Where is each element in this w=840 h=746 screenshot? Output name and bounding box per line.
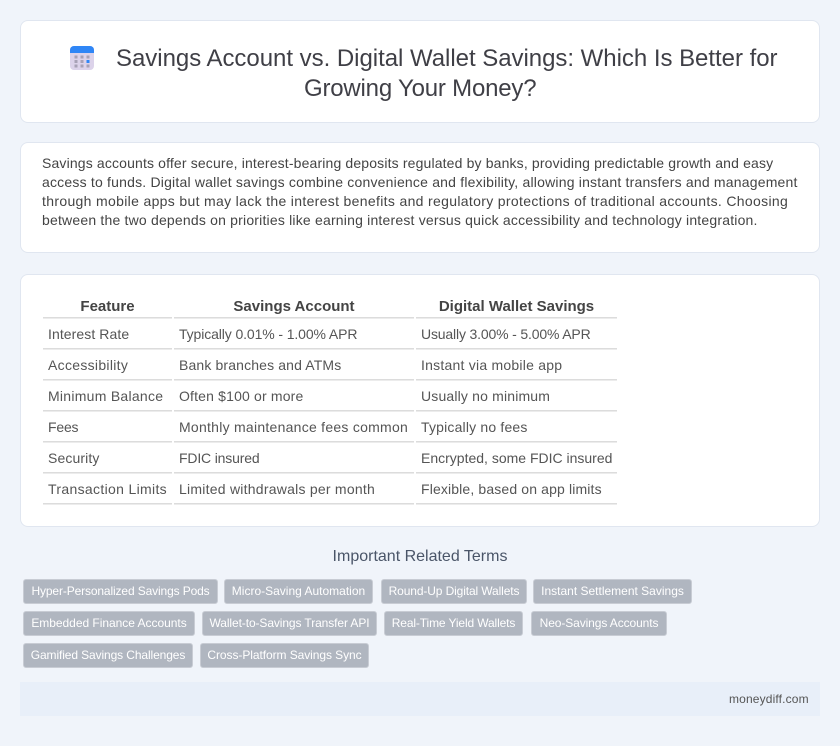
panel: introduction xyxy=(20,142,820,253)
row: Minimum Balance: Minimum Balance xyxy=(48,388,163,404)
tag xyxy=(384,611,523,636)
row: Fees: Fees xyxy=(48,419,78,435)
footer: moneydiff.com: moneydiff.com xyxy=(729,692,809,706)
tag xyxy=(23,579,218,604)
Digital Wallet transaction limits: Flexible, based on app limits xyxy=(421,481,602,497)
row: Accessibility: Accessibility xyxy=(48,357,128,373)
text block: introduction: through mobile apps but may lack the interest benefits and regulatory protections of traditional accounts. Choosing xyxy=(42,193,788,209)
panel: title header xyxy=(20,20,820,123)
table header: Savings Account: Savings Account xyxy=(233,298,355,315)
tag: Wallet-to-Savings Transfer API xyxy=(210,616,369,630)
tag xyxy=(533,579,692,604)
tag xyxy=(23,611,195,636)
Savings Account minimum balance: Often $100 or more xyxy=(179,388,303,404)
text block: introduction: Savings accounts offer secure, interest-bearing deposits regulated by banks, providing predictable growth and easy xyxy=(42,155,773,171)
icon: calendar xyxy=(70,46,94,70)
tag xyxy=(200,643,369,668)
tag: Cross-Platform Savings Sync xyxy=(207,648,362,662)
tag: Embedded Finance Accounts xyxy=(31,616,187,630)
tag: Real-Time Yield Wallets xyxy=(392,616,515,630)
text block: introduction xyxy=(42,155,798,228)
title: Savings Account vs. Digital Wallet Savings: Which Is Better for xyxy=(116,45,778,72)
footer bar xyxy=(20,682,820,716)
title xyxy=(116,45,778,102)
Digital Wallet interest rate: Usually 3.00% - 5.00% APR xyxy=(421,326,591,342)
row: Interest Rate: Interest Rate xyxy=(48,326,129,342)
tag: Micro-Saving Automation xyxy=(232,584,365,598)
title: Growing Your Money? xyxy=(304,75,536,102)
tag: Gamified Savings Challenges xyxy=(31,648,185,662)
tag: Round-Up Digital Wallets xyxy=(389,584,519,598)
Digital Wallet fees: Typically no fees xyxy=(421,419,528,435)
tag xyxy=(224,579,373,604)
heading: Important Related Terms: Important Related Terms xyxy=(333,548,507,565)
tag: Hyper-Personalized Savings Pods xyxy=(31,584,210,598)
Digital Wallet minimum balance: Usually no minimum xyxy=(421,388,550,404)
Savings Account interest rate: Typically 0.01% - 1.00% APR xyxy=(179,326,357,342)
Digital Wallet accessibility: Instant via mobile app xyxy=(421,357,562,373)
tag xyxy=(202,611,377,636)
Savings Account fees: Monthly maintenance fees common xyxy=(179,419,408,435)
Savings Account security: FDIC insured xyxy=(179,450,259,466)
tag xyxy=(531,611,667,636)
table header: Feature: Feature xyxy=(80,298,135,315)
tag: Neo-Savings Accounts xyxy=(540,616,658,630)
table header: Digital Wallet Savings: Digital Wallet Savings xyxy=(439,298,594,315)
tag: Instant Settlement Savings xyxy=(541,584,684,598)
panel: comparison table xyxy=(20,274,820,527)
text block: introduction: access to funds. Digital wallet savings combine convenience and flexibility, allowing instant transfers and management xyxy=(42,174,798,190)
Digital Wallet security: Encrypted, some FDIC insured xyxy=(421,450,612,466)
row: Transaction Limits: Transaction Limits xyxy=(48,481,167,497)
tag xyxy=(381,579,527,604)
Savings Account transaction limits: Limited withdrawals per month xyxy=(179,481,375,497)
Savings Account accessibility: Bank branches and ATMs xyxy=(179,357,341,373)
row: Security: Security xyxy=(48,450,100,466)
tag xyxy=(23,643,193,668)
text block: introduction: between the two depends on priorities like earning interest versus quick accessibility and technology integration. xyxy=(42,212,758,228)
